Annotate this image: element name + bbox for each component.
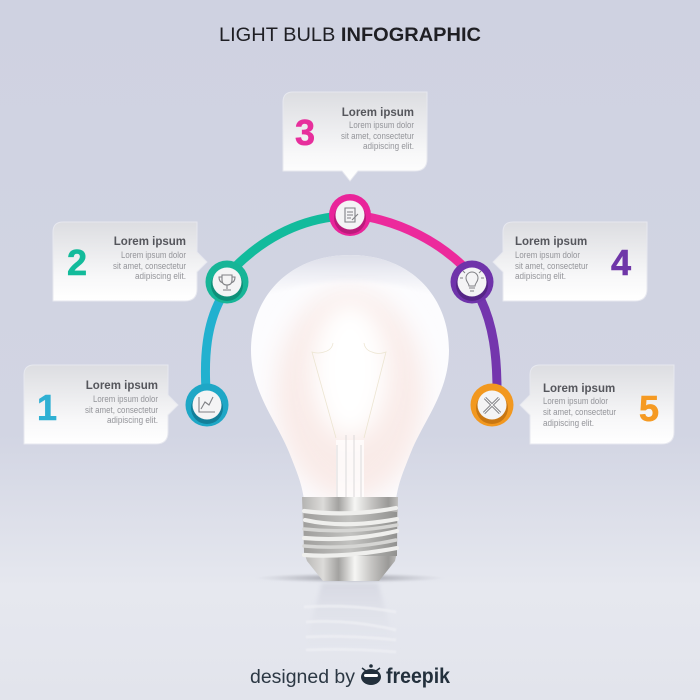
- card 3: sit amet, consectetur: [341, 131, 414, 141]
- light bulb: [251, 255, 449, 604]
- card 4: adipiscing elit.: [515, 271, 566, 281]
- card 1: 1: [37, 387, 57, 428]
- stem: [336, 435, 364, 498]
- card 2: sit amet, consectetur: [113, 261, 186, 271]
- card 5: [520, 365, 674, 444]
- arc segment 2: [235, 217, 332, 267]
- thread gaps: [304, 512, 397, 556]
- icon: chart: [199, 397, 215, 412]
- node 2: [206, 260, 248, 304]
- card 4: Lorem ipsum dolor: [515, 250, 580, 260]
- card 1: sit amet, consectetur: [85, 405, 158, 415]
- title: LIGHT BULB INFOGRAPHIC: [219, 25, 481, 46]
- card 5: Lorem ipsum: [543, 383, 615, 395]
- glass: [251, 255, 449, 497]
- card 3: adipiscing elit.: [363, 141, 414, 151]
- card 2: [53, 222, 207, 301]
- node 3: [329, 194, 371, 236]
- card 2: adipiscing elit.: [135, 271, 186, 281]
- node 5: [470, 384, 514, 426]
- icon: trophy: [219, 275, 235, 290]
- card 1: adipiscing elit.: [107, 415, 158, 425]
- ground shadow: [255, 573, 445, 583]
- card 1: Lorem ipsum: [86, 380, 158, 392]
- card 3: Lorem ipsum: [342, 107, 414, 119]
- card 4: sit amet, consectetur: [515, 261, 588, 271]
- icon: freepik logo: [361, 664, 381, 685]
- card 5: 5: [639, 388, 659, 429]
- card 5: sit amet, consectetur: [543, 407, 616, 417]
- card 1: [24, 365, 178, 444]
- card 4: 4: [611, 242, 631, 283]
- card 2: 2: [67, 242, 87, 283]
- collar: [302, 497, 398, 581]
- card 1: Lorem ipsum dolor: [93, 394, 158, 404]
- freepik credit: freepik: [386, 665, 450, 688]
- freepik credit: designed by: [250, 667, 356, 688]
- arc segment 4: [481, 300, 497, 390]
- card 5: adipiscing elit.: [543, 418, 594, 428]
- freepik credit: [250, 664, 450, 688]
- card 2: Lorem ipsum dolor: [121, 250, 186, 260]
- card 4: Lorem ipsum: [515, 236, 587, 248]
- threads: [304, 508, 397, 556]
- card 5: Lorem ipsum dolor: [543, 396, 608, 406]
- arc: [205, 217, 497, 390]
- card 3: 3: [295, 112, 315, 153]
- card 3: Lorem ipsum dolor: [349, 120, 414, 130]
- bulb reflection: [303, 583, 397, 652]
- icon: tools: [484, 398, 500, 413]
- filament: [312, 343, 386, 438]
- arc segment 1: [205, 300, 220, 390]
- card 2: Lorem ipsum: [114, 236, 186, 248]
- node 1: [186, 384, 228, 426]
- card 3: [283, 92, 427, 181]
- icon: light bulb: [460, 271, 484, 291]
- card 4: [493, 222, 647, 301]
- node 4: [450, 260, 494, 304]
- screw base: [302, 497, 398, 581]
- arc segment 3: [368, 217, 463, 266]
- icon: checklist: [345, 208, 358, 222]
